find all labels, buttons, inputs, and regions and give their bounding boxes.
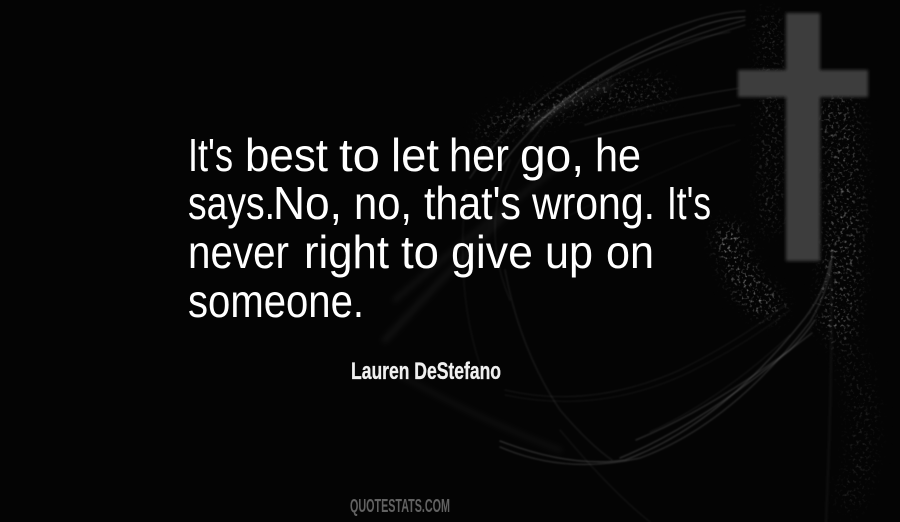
quote text: wrong. [531,177,655,229]
quote text: best [245,129,328,181]
icon: cross [738,13,868,261]
quote text: to [339,129,380,181]
quote poster [189,9,880,517]
quote text [188,129,711,327]
quote text: to [401,226,439,278]
background: star dust [476,9,880,512]
quote text: that's [424,177,521,229]
quote text: someone. [188,275,364,327]
quote text: he [595,129,641,181]
quote text: let [391,129,439,181]
background: soft glow bands [385,85,610,450]
quote text: give [451,226,533,278]
quote text: right [304,226,389,278]
quote text: It's [188,129,233,181]
author name: Lauren DeStefano [351,358,501,385]
quote text: on [606,226,654,278]
background: light swirl arcs [463,11,832,522]
quote text: go, [520,129,584,181]
watermark: site name: QUOTESTATS.COM [350,496,450,516]
quote text: her [449,129,509,181]
quote text: It's [667,177,711,229]
quote text: never [188,226,289,278]
quote text: No, [273,177,342,229]
quote text: up [545,226,593,278]
quote text: says. [188,177,275,229]
quote text: no, [354,177,412,229]
